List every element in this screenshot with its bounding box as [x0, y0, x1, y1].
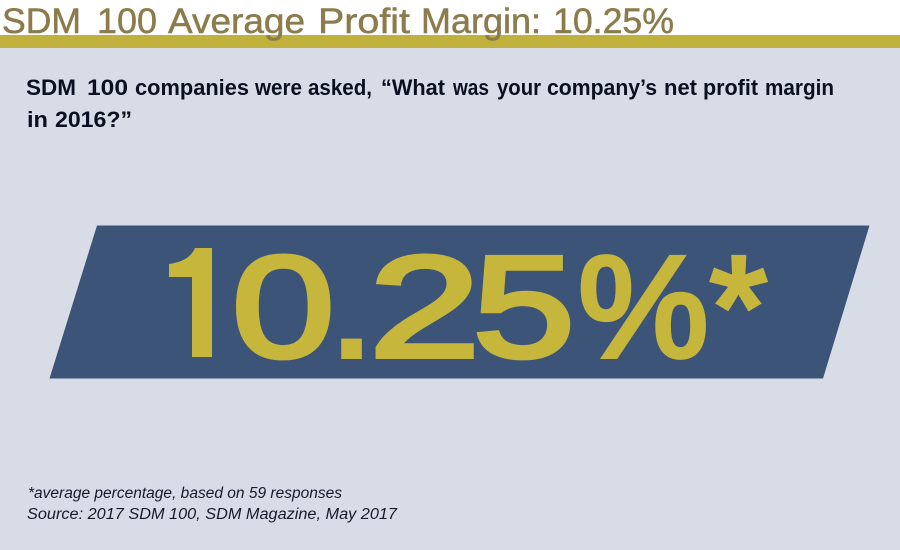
title: Average	[168, 2, 305, 41]
header white strip	[0, 0, 900, 35]
question text: in	[27, 107, 48, 132]
big number 10.25%*: .	[330, 227, 374, 388]
question text: “What	[381, 75, 446, 100]
question text: was	[452, 75, 489, 100]
title: Margin:	[421, 2, 541, 41]
big number 10.25%*: 0	[232, 227, 335, 388]
title: Profit	[318, 2, 410, 41]
question text: your	[497, 75, 541, 100]
footnote: Source: 2017 SDM 100, SDM Magazine, May 2017	[27, 506, 398, 523]
big number 10.25%*: 1	[148, 223, 248, 391]
question text: company’s	[547, 75, 657, 100]
big number 10.25%*: *	[710, 226, 767, 387]
question text	[26, 75, 834, 132]
question text: 100	[87, 75, 128, 100]
big number 10.25%*: 2	[369, 226, 480, 387]
question text: SDM	[26, 75, 76, 100]
title: 10.25%	[553, 2, 674, 41]
footnote	[27, 485, 398, 523]
blue parallelogram banner	[50, 226, 870, 378]
question text: asked,	[308, 75, 372, 100]
question text: net	[664, 75, 698, 100]
title	[2, 2, 674, 41]
big number 10.25%*	[169, 248, 768, 360]
big number 10.25%*: %	[578, 226, 709, 387]
header gold band	[0, 35, 900, 48]
question text: profit	[703, 75, 759, 100]
question text: were	[254, 75, 302, 100]
footnote: *average percentage, based on 59 responses	[28, 485, 342, 502]
question text: 2016?”	[55, 107, 132, 132]
question text: margin	[765, 75, 834, 100]
question text: companies	[135, 75, 249, 100]
big number 10.25%*: 5	[473, 226, 575, 387]
title: 100	[97, 2, 157, 41]
title: SDM	[2, 2, 81, 41]
